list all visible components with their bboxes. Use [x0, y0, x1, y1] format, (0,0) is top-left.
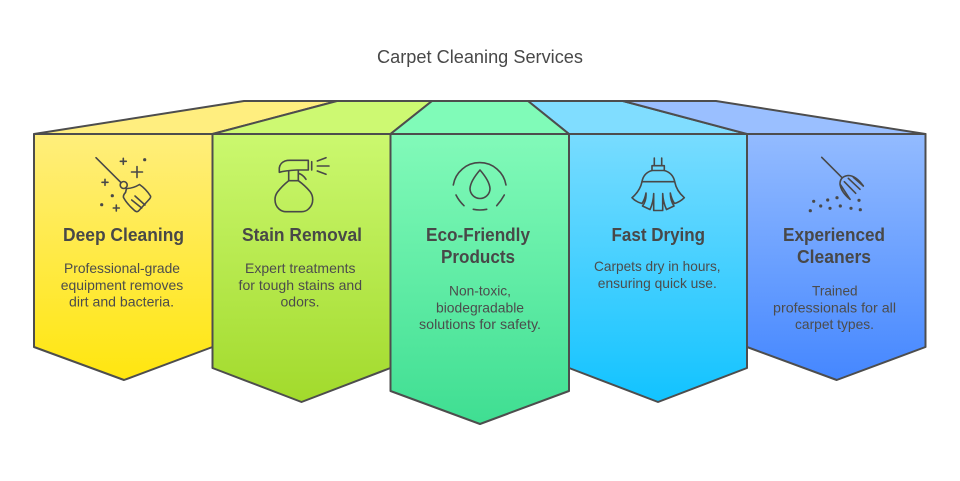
- text: experienced cleaners description: Trained: [812, 282, 858, 298]
- panel: eco-friendly products: [390, 101, 569, 424]
- text: stain removal description: for tough stains and: [239, 277, 362, 293]
- text: experienced cleaners description: carpet types.: [795, 316, 874, 332]
- text: stain removal description: odors.: [280, 294, 320, 310]
- text: experienced cleaners description: professionals for all: [773, 300, 896, 316]
- panel: experienced cleaners: [623, 101, 926, 380]
- text: fast drying description: ensuring quick use.: [598, 275, 717, 291]
- heading: experienced cleaners: [783, 225, 885, 267]
- text: fast drying description: [594, 258, 721, 291]
- heading: experienced cleaners: Experienced: [783, 225, 885, 245]
- heading: eco-friendly products: Eco-Friendly: [426, 225, 530, 245]
- text: deep cleaning description: [61, 260, 183, 310]
- icon: water drop in broken circle: [453, 163, 506, 210]
- text: fast drying description: Carpets dry in hours,: [594, 258, 721, 274]
- heading: deep cleaning: Deep Cleaning: [63, 225, 184, 245]
- heading: eco-friendly products: [426, 225, 530, 267]
- text: stain removal description: Expert treatments: [245, 260, 356, 276]
- panel: stain removal: [212, 101, 432, 402]
- text: deep cleaning description: Professional-grade: [64, 260, 180, 276]
- heading: eco-friendly products: Products: [441, 247, 515, 267]
- text: eco-friendly description: Non-toxic,: [449, 282, 511, 298]
- text: deep cleaning description: equipment removes: [61, 277, 183, 293]
- heading: experienced cleaners: Cleaners: [797, 247, 871, 267]
- text: eco-friendly description: [419, 282, 541, 332]
- text: eco-friendly description: solutions for safety.: [419, 316, 541, 332]
- text: experienced cleaners description: [773, 282, 896, 332]
- heading: fast drying: Fast Drying: [612, 225, 705, 245]
- title: Carpet Cleaning Services: [377, 47, 583, 67]
- icon: spray bottle: [275, 158, 329, 212]
- text: deep cleaning description: dirt and bacteria.: [69, 294, 174, 310]
- icon: broom with sparkles: [96, 158, 151, 212]
- text: stain removal description: [239, 260, 362, 310]
- panel: fast drying: [528, 101, 747, 402]
- heading: stain removal: Stain Removal: [242, 225, 362, 245]
- icon: rake with dust: [809, 157, 863, 212]
- panel: deep cleaning: [34, 101, 337, 380]
- icon: brush head: [632, 158, 684, 210]
- text: eco-friendly description: biodegradable: [436, 300, 524, 316]
